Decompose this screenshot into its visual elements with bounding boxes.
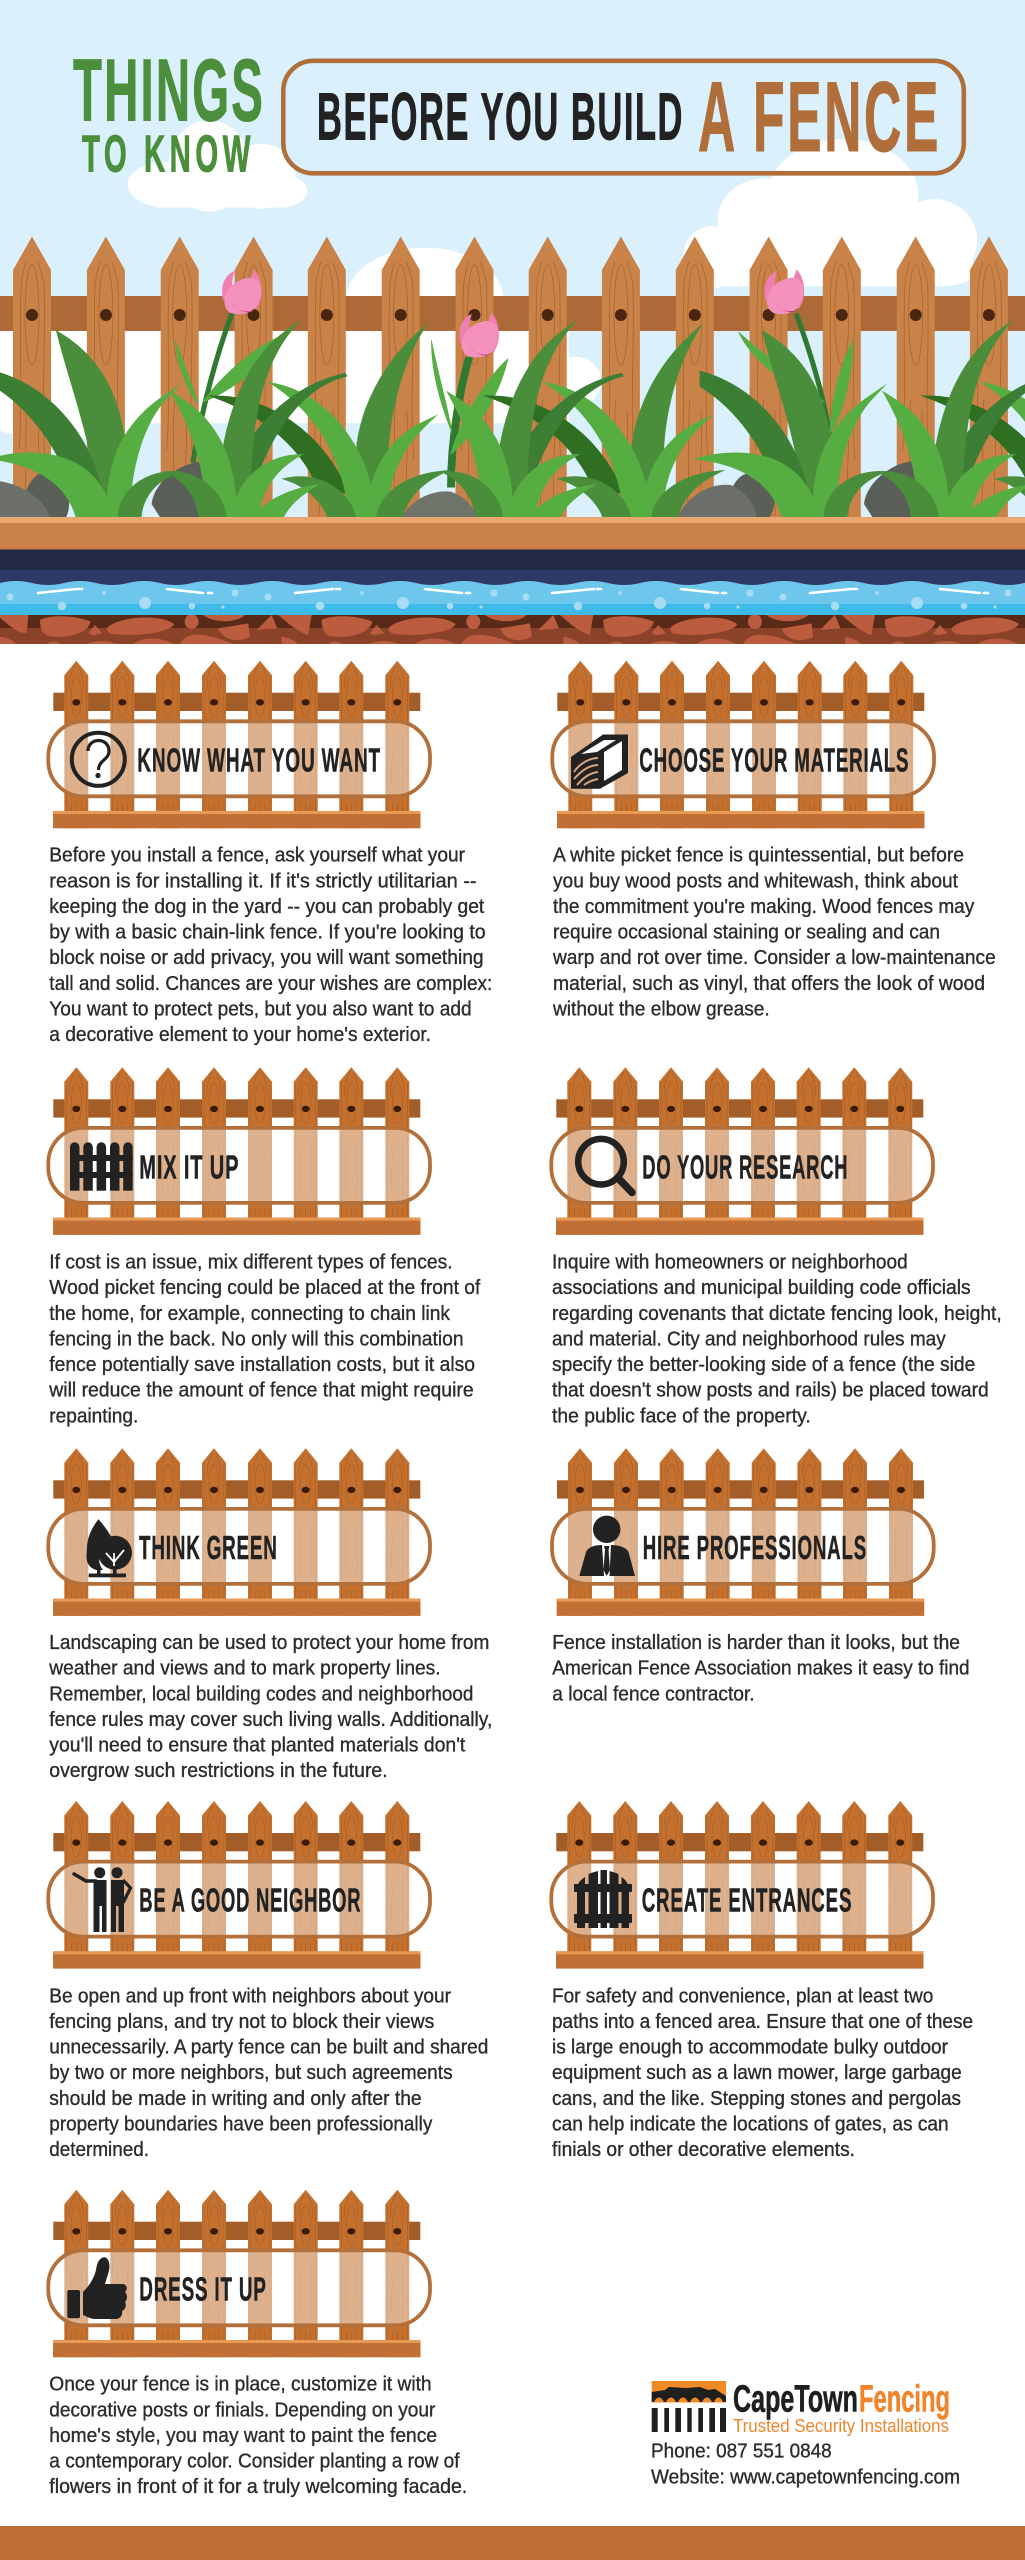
text block: home's style, you may want to paint the fence <box>49 2424 437 2447</box>
title: things to know: THINGS <box>73 40 265 140</box>
hero scene: sky, clouds, fence, plants <box>0 0 1025 644</box>
text block: Fence installation is harder than it looks, but the <box>552 1631 960 1654</box>
heading: BE A GOOD NEIGHBOR <box>139 1882 361 1919</box>
logo wordmark: CapeTown <box>733 2379 858 2421</box>
text block: decorative posts or finials. Depending on your <box>49 2398 435 2421</box>
text block <box>49 1984 488 2161</box>
logo wordmark: Fencing <box>859 2379 950 2421</box>
icon: arched gate <box>574 1870 632 1928</box>
text block: can help indicate the locations of gates, as can <box>552 2112 949 2136</box>
clouds <box>0 120 977 440</box>
icon: two neighbors <box>74 1867 130 1932</box>
text block <box>48 1631 492 1782</box>
text block: Be open and up front with neighbors about your <box>49 1984 451 2007</box>
icon: wood block <box>571 734 628 789</box>
text block: you buy wood posts and whitewash, think about <box>553 869 958 892</box>
text block: determined. <box>49 2138 149 2161</box>
heading: DRESS IT UP <box>139 2271 267 2308</box>
logo: Cape Town Fencing <box>652 2379 950 2436</box>
text block: that doesn't show posts and rails) be placed toward <box>552 1379 989 1402</box>
text block: You want to protect pets, but you also want to add <box>49 998 472 1020</box>
text block <box>48 1250 481 1427</box>
text block: will reduce the amount of fence that might require <box>48 1379 474 1402</box>
text block: a local fence contractor. <box>552 1682 755 1705</box>
panel: be a good neighbor <box>48 1801 488 2161</box>
soil with stones <box>0 614 1025 644</box>
title: things to know: TO KNOW <box>82 126 255 184</box>
text block: unnecessarily. A party fence can be built and shared <box>49 2036 488 2059</box>
contact details: Website: www.capetownfencing.com <box>651 2465 960 2488</box>
text block: a contemporary color. Consider planting a row of <box>49 2450 460 2473</box>
text block: Landscaping can be used to protect your home from <box>49 1631 489 1654</box>
text block: overgrow such restrictions in the future. <box>49 1759 388 1782</box>
text block: fencing plans, and try not to block their views <box>49 2010 434 2033</box>
text block: weather and views and to mark property lines. <box>48 1657 441 1680</box>
text block: require occasional staining or sealing and can <box>553 921 940 944</box>
panel: choose your materials <box>552 661 996 1020</box>
text block: specify the better-looking side of a fence (the side <box>552 1353 975 1376</box>
text block: finials or other decorative elements. <box>552 2138 855 2161</box>
text block: and material. City and neighborhood rules may <box>552 1327 946 1350</box>
text block <box>49 844 492 1046</box>
text block: material, such as vinyl, that offers the look of wood <box>553 972 985 995</box>
panel: think green <box>48 1448 492 1782</box>
text block: is large enough to accommodate bulky outdoor <box>552 2036 948 2059</box>
plants, rocks and tulips <box>0 269 1025 532</box>
text block: fence potentially save installation costs, but it also <box>49 1353 475 1376</box>
panel: dress it up <box>48 2190 467 2498</box>
text block <box>552 1984 973 2161</box>
text block: reason is for installing it. If it's strictly utilitarian -- <box>49 869 477 892</box>
heading: DO YOUR RESEARCH <box>642 1148 848 1185</box>
text block: fence rules may cover such living walls. Additionally, <box>49 1708 492 1731</box>
text block: paths into a fenced area. Ensure that one of these <box>552 2010 973 2033</box>
contact details <box>651 2439 960 2488</box>
text block: keeping the dog in the yard -- you can probably get <box>49 895 485 918</box>
logo tagline: Trusted Security Installations <box>733 2416 949 2436</box>
panel: hire professionals <box>552 1448 970 1705</box>
text block: If cost is an issue, mix different types of fences. <box>49 1250 453 1274</box>
title: things to know <box>73 40 265 184</box>
heading: CREATE ENTRANCES <box>642 1882 852 1919</box>
title box: before you build a fence: BEFORE YOU BUILD <box>317 80 684 154</box>
text block <box>552 1631 970 1705</box>
text block: should be made in writing and only after the <box>49 2087 422 2110</box>
text block: the public face of the property. <box>552 1404 811 1427</box>
text block: by two or more neighbors, but such agreements <box>49 2061 453 2084</box>
panel: do your research <box>551 1067 1002 1427</box>
icon: magnifier <box>578 1139 632 1192</box>
text block <box>552 1250 1002 1427</box>
text block: without the elbow grease. <box>552 998 770 1020</box>
text block: Inquire with homeowners or neighborhood <box>552 1250 908 1274</box>
text block: the commitment you're making. Wood fences may <box>553 895 975 918</box>
text block: equipment such as a lawn mower, large garbage <box>552 2061 962 2084</box>
text block: Once your fence is in place, customize it with <box>49 2373 432 2396</box>
text block: Before you install a fence, ask yourself what your <box>49 844 465 867</box>
text block <box>552 844 996 1020</box>
text block: tall and solid. Chances are your wishes are complex: <box>49 972 492 995</box>
text block: Remember, local building codes and neighborhood <box>49 1682 473 1705</box>
dark bands and water <box>0 550 1025 615</box>
text block: property boundaries have been professionally <box>49 2112 433 2136</box>
text block: American Fence Association makes it easy to find <box>552 1657 970 1680</box>
text block: For safety and convenience, plan at least two <box>552 1984 933 2007</box>
text block: block noise or add privacy, you will want something <box>49 946 484 969</box>
icon: picket fence <box>70 1142 133 1191</box>
text block <box>49 2373 467 2498</box>
text block: cans, and the like. Stepping stones and pergolas <box>552 2087 961 2110</box>
text block: A white picket fence is quintessential, but before <box>553 844 964 867</box>
text block: by with a basic chain-link fence. If you're looking to <box>49 921 486 944</box>
text block: warp and rot over time. Consider a low-maintenance <box>552 946 996 969</box>
contact details: Phone: 087 551 0848 <box>651 2439 832 2462</box>
text block: repainting. <box>49 1404 138 1427</box>
icon: professional person <box>579 1516 635 1576</box>
panel: create entrances <box>551 1801 973 2161</box>
title box: before you build a fence <box>283 61 964 173</box>
logo mark <box>652 2381 726 2432</box>
heading: KNOW WHAT YOU WANT <box>137 742 381 779</box>
panel: mix it up <box>48 1067 481 1427</box>
icon: trees <box>87 1519 132 1577</box>
text block: associations and municipal building code officials <box>552 1276 971 1299</box>
planter plank <box>0 517 1025 550</box>
footer band <box>0 2526 1025 2560</box>
heading: THINK GREEN <box>139 1529 278 1566</box>
text block: fencing in the back. No only will this combination <box>49 1327 464 1350</box>
hero fence <box>0 236 1025 517</box>
icon: thumbs up <box>67 2257 127 2319</box>
panel: know what you want <box>48 661 492 1046</box>
text block: you'll need to ensure that planted materials don't <box>49 1734 466 1756</box>
text block: the home, for example, connecting to chain link <box>49 1302 451 1325</box>
icon: question mark <box>72 733 125 786</box>
heading: MIX IT UP <box>139 1148 239 1185</box>
text block: Wood picket fencing could be placed at the front of <box>49 1276 481 1299</box>
text block: regarding covenants that dictate fencing look, height, <box>552 1302 1002 1325</box>
text block: flowers in front of it for a truly welcoming facade. <box>49 2475 467 2498</box>
text block: a decorative element to your home's exterior. <box>49 1023 431 1046</box>
